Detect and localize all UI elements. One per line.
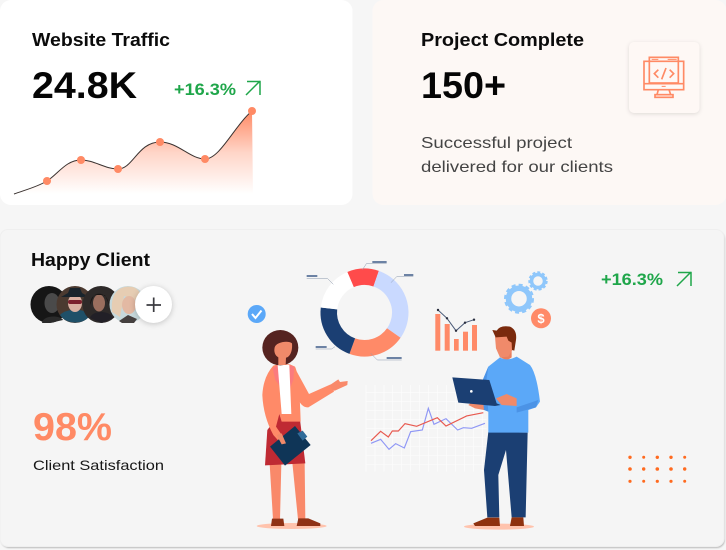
line chart grid [366,385,487,472]
donut leader lines and labels [307,262,413,360]
area chart [14,107,256,194]
value: 150+: 150+ [421,65,506,106]
description: Successful project [421,135,573,152]
caption: client satisfaction: Client Satisfaction [33,457,164,473]
panel: happy client [0,230,725,548]
panel: project complete [372,0,726,205]
icon: dollar coin: $ [537,311,545,326]
growth: +16.3%: +16.3% [174,80,236,99]
growth: +16.3%: +16.3% [601,270,663,289]
description: delivered for our clients [421,159,613,176]
icon: dollar coin [531,308,551,328]
icon: code monitor [629,42,700,113]
heading: website traffic: Website Traffic [32,30,170,50]
icon: blue check [248,305,266,323]
panel: website traffic [0,0,352,205]
value: 24.8K: 24.8K [32,65,137,106]
line series: red [371,413,483,441]
icon: gears [506,272,547,312]
description [421,135,613,176]
icon: up arrow [246,81,260,95]
dot pattern [628,456,686,483]
illustration: man with laptop [452,326,540,530]
donut chart [307,262,414,362]
heading: project complete: Project Complete [421,30,584,50]
icon: up arrow [677,272,691,286]
illustration: woman with clipboard [257,330,348,529]
value: 98%: 98% [33,406,112,449]
bar and line mini chart [435,309,477,351]
heading: happy client: Happy Client [31,250,150,270]
line series: purple [371,408,485,449]
avatars [30,286,172,323]
